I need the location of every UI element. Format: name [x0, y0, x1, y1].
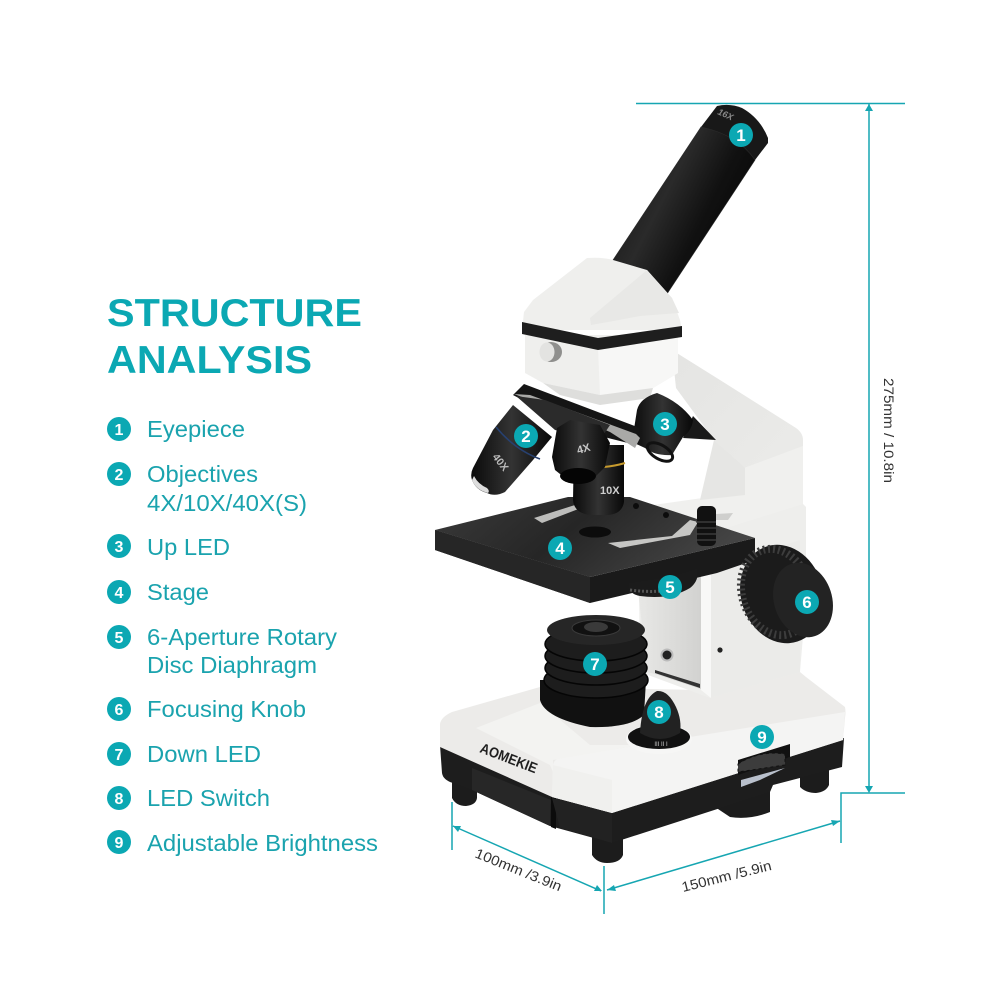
- badge 5: [658, 575, 682, 599]
- title: [107, 292, 362, 382]
- width dimension: 150mm /5.9in: [680, 857, 773, 895]
- depth dimension: 100mm /3.9in: [473, 845, 564, 894]
- 40X objective: 40X: [490, 451, 511, 474]
- up LED: [632, 393, 716, 465]
- legend item 8: LED Switch: [147, 785, 270, 811]
- badge 3: [653, 412, 677, 436]
- brand name: AOMEKIE: [478, 741, 540, 777]
- height dimension: [636, 104, 905, 843]
- microscope illustration: [435, 105, 846, 863]
- stage: [435, 497, 755, 603]
- legend item 5: 6-Aperture Rotary: [147, 624, 338, 650]
- legend item 3: [107, 534, 230, 560]
- badge 9: [750, 725, 774, 749]
- down LED condenser: [540, 615, 648, 727]
- stage clip left: [534, 505, 581, 523]
- badge 7: [583, 652, 607, 676]
- badge 7: 7: [590, 655, 600, 674]
- legend item 3: 3: [115, 539, 124, 556]
- LED switch: III II I: [654, 742, 668, 748]
- legend item 2: Objectives: [147, 461, 258, 487]
- title: ANALYSIS: [107, 339, 312, 382]
- arm: [653, 350, 803, 530]
- badge 1: [729, 123, 753, 147]
- focusing knob: [728, 534, 842, 654]
- badge 4: [548, 536, 572, 560]
- feet: [452, 770, 829, 863]
- width dimension: [607, 820, 840, 895]
- legend item 5: [107, 624, 338, 678]
- 10X objective: 10X: [600, 485, 620, 497]
- badge 3: 3: [660, 415, 670, 434]
- head housing: [522, 258, 682, 405]
- legend item 6: 6: [115, 702, 124, 719]
- eyepiece tube: [613, 105, 768, 294]
- badge 6: 6: [802, 593, 812, 612]
- lower column: [638, 503, 806, 698]
- legend item 9: 9: [115, 835, 124, 852]
- brightness wheel: [738, 744, 790, 787]
- legend item 1: 1: [115, 422, 124, 439]
- badge 8: [647, 700, 671, 724]
- badge 4: 4: [555, 539, 565, 558]
- legend item 8: 8: [115, 791, 124, 808]
- legend item 5: Disc Diaphragm: [147, 652, 317, 678]
- legend item 5: 5: [115, 630, 124, 647]
- legend item 7: Down LED: [147, 741, 261, 767]
- aperture disc: [628, 568, 698, 597]
- legend item 1: [107, 416, 245, 442]
- stage clip right: [608, 520, 698, 548]
- 10X objective: [573, 445, 625, 515]
- 40X objective: [471, 405, 552, 495]
- legend item 4: 4: [115, 585, 124, 602]
- legend item 6: Focusing Knob: [147, 696, 306, 722]
- head black band: [522, 322, 682, 350]
- badge 2: 2: [521, 427, 531, 446]
- badge 6: [795, 590, 819, 614]
- legend item 1: Eyepiece: [147, 416, 245, 442]
- badge 1: 1: [736, 126, 746, 145]
- 4X objective: 4X: [576, 442, 592, 457]
- head screw: [540, 342, 562, 362]
- badge 9: 9: [757, 728, 767, 747]
- title: STRUCTURE: [107, 292, 362, 335]
- turret: [513, 384, 640, 448]
- eyepiece cap: [701, 105, 768, 160]
- legend item 2: [107, 461, 307, 516]
- base black lower housing: [440, 738, 844, 843]
- depth dimension: [452, 802, 604, 914]
- badge 8: 8: [654, 703, 664, 722]
- legend item 7: 7: [115, 747, 124, 764]
- badge 5: 5: [665, 578, 675, 597]
- base white body: [440, 672, 846, 813]
- parts legend: [107, 416, 378, 856]
- 4X objective: [552, 420, 610, 484]
- callout badges on microscope: [514, 123, 819, 749]
- eyepiece tube: 16X: [716, 107, 736, 123]
- badge 2: [514, 424, 538, 448]
- legend item 4: Stage: [147, 579, 209, 605]
- legend item 3: Up LED: [147, 534, 230, 560]
- legend item 2: 2: [115, 467, 124, 484]
- legend item 4: [107, 579, 209, 605]
- LED switch: [626, 691, 692, 754]
- height dimension: 275mm / 10.8in: [881, 378, 897, 483]
- clip post: [696, 506, 716, 546]
- legend item 2: 4X/10X/40X(S): [147, 490, 307, 516]
- legend item 9: Adjustable Brightness: [147, 830, 378, 856]
